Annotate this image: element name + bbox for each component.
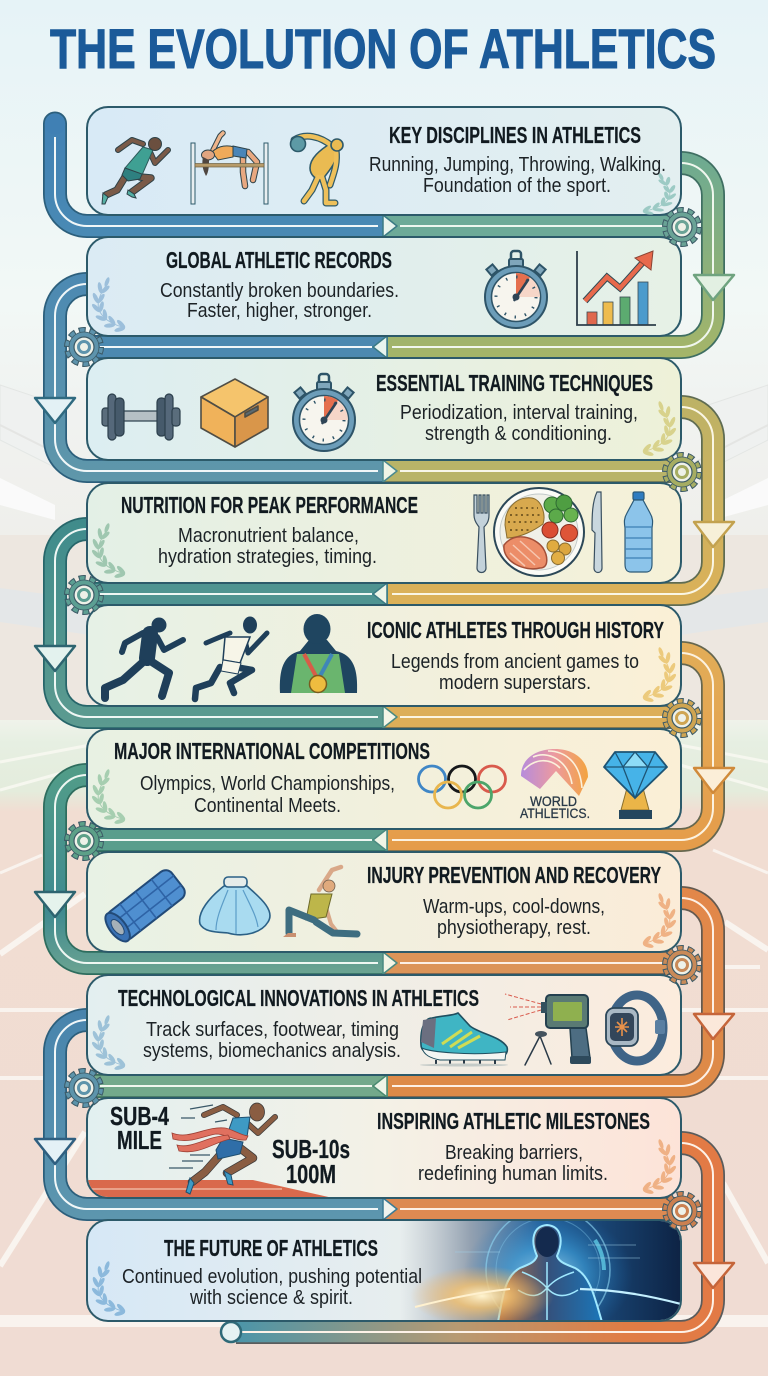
panel 8: technology — [87, 975, 681, 1075]
panel 3: training techniques — [87, 358, 681, 460]
laurel — [91, 769, 126, 825]
text block: Constantly broken boundaries. — [160, 279, 399, 302]
label: sub-10s 100m — [272, 1134, 350, 1189]
logo: world athletics: WORLD — [530, 794, 577, 809]
chevron markers along track — [373, 215, 397, 1220]
icon: diamond trophy — [604, 752, 667, 819]
panel 2: global records — [87, 237, 681, 336]
text block: Running, Jumping, Throwing, Walking. — [369, 153, 666, 176]
panel 9: milestones — [87, 1098, 681, 1198]
icon: olympic rings — [418, 766, 506, 808]
image: glowing futuristic athlete — [409, 1221, 680, 1320]
text block: Periodization, interval training, — [400, 401, 638, 424]
icon: smartwatch — [606, 995, 665, 1061]
panel 5: iconic athletes — [87, 605, 681, 706]
text block — [400, 401, 638, 445]
logo: world athletics: ATHLETICS. — [520, 806, 590, 821]
heading: KEY DISCIPLINES IN ATHLETICS — [389, 122, 641, 148]
label: sub-4 mile — [110, 1101, 169, 1155]
heading: NUTRITION FOR PEAK PERFORMANCE — [121, 492, 418, 518]
red track strip — [88, 1180, 333, 1198]
laurel — [642, 173, 677, 215]
text block: Continued evolution, pushing potential — [122, 1265, 422, 1288]
icon: modern runner silhouette — [195, 616, 267, 699]
panel 10: the future — [86, 1219, 682, 1322]
icon: plate of food — [494, 488, 584, 576]
text block — [122, 1265, 422, 1309]
text block — [391, 650, 639, 694]
gears on track — [68, 211, 698, 1227]
laurel — [91, 1015, 126, 1071]
heading: MAJOR INTERNATIONAL COMPETITIONS — [114, 738, 430, 764]
text block — [158, 524, 377, 568]
heading: INSPIRING ATHLETIC MILESTONES — [377, 1108, 650, 1134]
label: sub-4 mile: MILE — [117, 1125, 162, 1155]
label: sub-10s 100m: SUB-10s — [272, 1134, 350, 1164]
heading: GLOBAL ATHLETIC RECORDS — [166, 247, 392, 273]
icon: discus thrower — [290, 136, 343, 203]
icon: knife — [592, 492, 602, 572]
laurel — [91, 523, 126, 579]
text block: Legends from ancient games to — [391, 650, 639, 673]
text block — [418, 1141, 608, 1185]
text block: Faster, higher, stronger. — [187, 299, 372, 322]
text block: systems, biomechanics analysis. — [143, 1039, 401, 1062]
text block: with science & spirit. — [189, 1286, 353, 1309]
icon: stopwatch — [485, 251, 547, 328]
serpentine path track — [55, 124, 713, 1332]
icon: medalist bust — [280, 614, 357, 693]
icon: rising bar chart — [577, 251, 656, 325]
text block: modern superstars. — [439, 671, 591, 694]
heading: TECHNOLOGICAL INNOVATIONS IN ATHLETICS — [118, 985, 479, 1011]
icon: fork — [474, 495, 489, 572]
panel 6: competitions — [87, 729, 681, 829]
text block: hydration strategies, timing. — [158, 545, 377, 568]
text block: physiotherapy, rest. — [437, 916, 591, 939]
laurel — [642, 893, 677, 949]
icon: sprinter — [102, 138, 168, 204]
text block: Olympics, World Championships, — [140, 772, 395, 795]
laurel — [642, 647, 677, 703]
icon: water bottle — [624, 492, 653, 572]
text block — [369, 153, 666, 197]
icon: stretching figure — [283, 867, 357, 937]
logo: world athletics — [520, 749, 590, 821]
panel 7: injury prevention — [87, 852, 681, 952]
icon: ice bag — [200, 877, 270, 935]
laurel — [642, 1139, 677, 1195]
text block: Continental Meets. — [194, 794, 341, 817]
text block: strength & conditioning. — [425, 422, 612, 445]
text block: Track surfaces, footwear, timing — [146, 1018, 399, 1041]
icon: biomechanics camera — [505, 994, 591, 1065]
text block — [140, 772, 395, 817]
direction arrows on the track — [35, 275, 734, 1288]
laurel — [91, 277, 126, 333]
text block: Foundation of the sport. — [423, 174, 611, 197]
icon: dumbbell — [102, 394, 180, 440]
icon: stopwatch — [293, 374, 355, 451]
text block — [160, 279, 399, 322]
panel 4: nutrition — [87, 483, 681, 583]
label: sub-4 mile: SUB-4 — [110, 1101, 169, 1131]
laurel — [91, 1261, 126, 1317]
text block: Macronutrient balance, — [178, 524, 359, 547]
label: sub-10s 100m: 100M — [286, 1159, 336, 1189]
icon: plyometric box — [201, 379, 268, 447]
text block — [423, 895, 605, 939]
icon: foam roller — [101, 867, 188, 945]
laurel — [642, 401, 677, 457]
text block: redefining human limits. — [418, 1162, 608, 1185]
text block: Warm-ups, cool-downs, — [423, 895, 605, 918]
heading: THE FUTURE OF ATHLETICS — [164, 1235, 378, 1261]
track start endpoint — [221, 1322, 241, 1342]
icon: high jump — [191, 133, 268, 204]
icon: running shoe — [420, 1013, 508, 1066]
icon: sprinter breaking tape — [169, 1103, 275, 1194]
text block: Breaking barriers, — [445, 1141, 583, 1164]
icon: ancient runner silhouette — [105, 618, 183, 698]
panel 1: key disciplines — [87, 107, 681, 215]
text block — [143, 1018, 401, 1062]
